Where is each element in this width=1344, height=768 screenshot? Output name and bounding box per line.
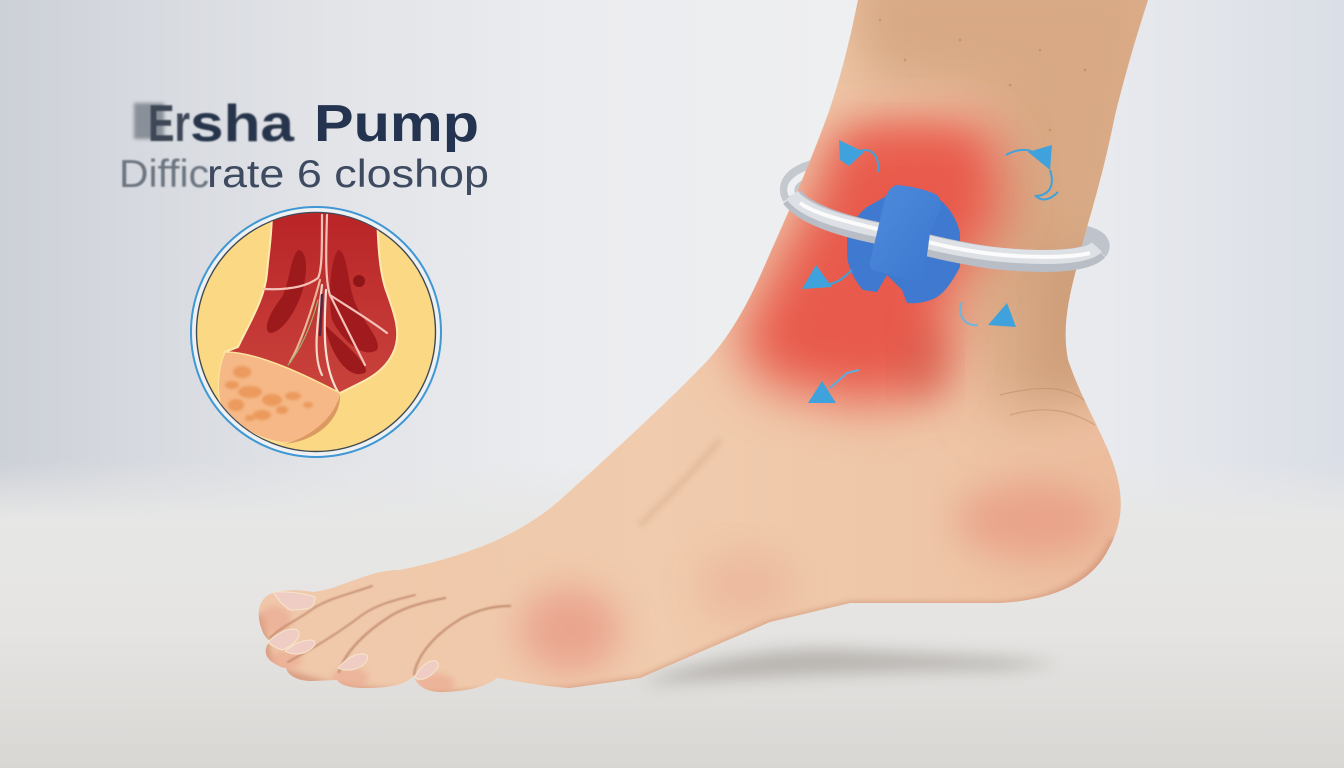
flow arrow: upper right — [1006, 145, 1058, 199]
title: sha — [190, 95, 295, 153]
inset: tan tissue block — [218, 352, 340, 443]
title: Pump — [314, 95, 479, 153]
ankle band tube — [792, 195, 1097, 261]
subtitle — [119, 153, 489, 196]
toes: creases — [270, 586, 510, 674]
foot: creases — [1000, 388, 1095, 425]
ankle band back arc — [790, 165, 1099, 250]
title — [134, 95, 479, 153]
inset: nerves — [264, 215, 387, 392]
pump rear disc — [847, 190, 960, 303]
inset: outer ring — [191, 207, 441, 457]
flow arrow: middle left — [802, 265, 852, 289]
title: Er — [148, 95, 190, 153]
flow arrow: lower — [808, 370, 859, 403]
subtitle: Diffic — [119, 153, 209, 196]
pump front band — [870, 185, 941, 282]
toenails — [268, 592, 438, 679]
foot: freckle texture — [879, 19, 1086, 131]
ground shadow under foot — [640, 649, 1060, 684]
foot: base skin — [259, 0, 1148, 692]
foot: lower edge shading — [258, 540, 1115, 696]
inset: dark chambers — [267, 250, 306, 333]
subtitle: rate 6 closhop — [207, 153, 489, 196]
foot: shaded ankle — [840, 0, 1180, 420]
toes: pink tips — [259, 606, 455, 692]
flow arrow: middle right — [960, 302, 1016, 327]
foot and leg — [258, 0, 1180, 696]
inset: red tissue — [225, 210, 397, 393]
flow arrow: upper left — [839, 140, 878, 172]
foot: heel redness — [955, 482, 1105, 558]
anatomy cross-section inset — [191, 207, 441, 457]
foot: forefoot redness — [520, 588, 620, 672]
foot: inflamed ankle area — [735, 125, 1005, 405]
